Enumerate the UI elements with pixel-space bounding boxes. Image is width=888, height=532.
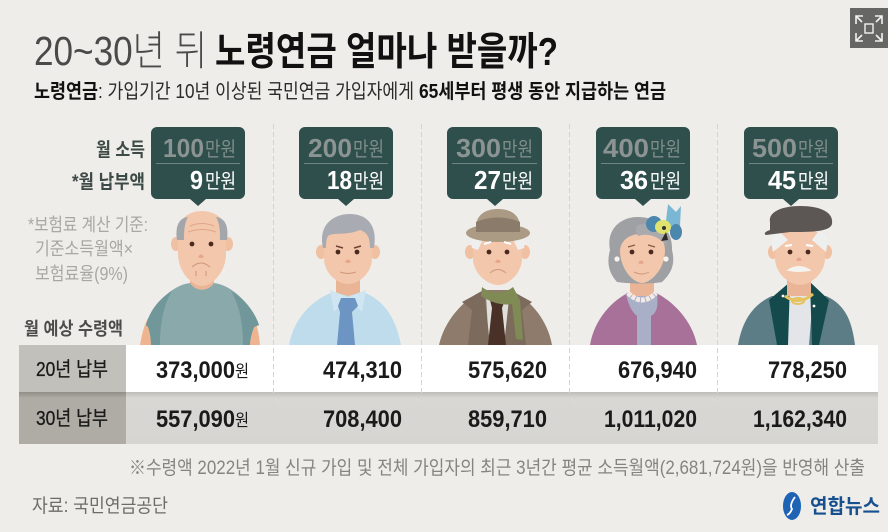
bubble: 400만원 / 36만원: 36 xyxy=(620,165,648,195)
bubble: 300만원 / 27만원: 만원 xyxy=(502,138,533,161)
row: 20년 납부: 778,250 xyxy=(768,357,847,384)
row: 20년 납부: 676,940 xyxy=(618,357,697,384)
subtitle: 65세부터 평생 동안 지급하는 연금 xyxy=(419,80,666,103)
row: 30년 납부: 557,090 xyxy=(156,406,235,433)
bubble: 200만원 / 18만원: 18 xyxy=(327,165,352,195)
row: 30년 납부 xyxy=(36,406,847,433)
row labels: income and contribution: 월 소득 xyxy=(96,139,145,161)
row: 30년 납부: 30년 납부 xyxy=(36,407,108,430)
source: 자료: 국민연금공단 xyxy=(32,495,168,517)
person: 400만원 woman with flower and pearls xyxy=(590,204,697,345)
bubble: 500만원 / 45만원: 500 xyxy=(752,133,797,163)
heading: expected monthly pension: 월 예상 수령액 xyxy=(24,319,123,339)
bubble: 100만원 / 9만원: 만원 xyxy=(205,170,236,193)
bubble: 100만원 / 9만원: 9 xyxy=(190,165,203,195)
bubble: 500만원 / 45만원: 만원 xyxy=(798,138,829,161)
subtitle: : 가입기간 10년 이상된 국민연금 가입자에게 xyxy=(98,80,414,103)
row: 30년 납부: 859,710 xyxy=(468,406,547,433)
row: 20년 납부: 474,310 xyxy=(323,357,402,384)
bubble: 500만원 / 45만원: 45 xyxy=(768,165,796,195)
bubble: 300만원 / 27만원: 300 xyxy=(456,133,501,163)
person: 500만원 man with flat cap and gold chain xyxy=(738,206,855,345)
bubble: 400만원 / 36만원: 만원 xyxy=(650,138,681,161)
row: 20년 납부 xyxy=(36,357,847,384)
row: 20년 납부: 373,000 xyxy=(156,357,235,384)
bubble: 100만원 / 9만원: 만원 xyxy=(205,138,236,161)
note: premium calculation basis: 기준소득월액× xyxy=(35,239,133,259)
subtitle: 노령연금 xyxy=(34,80,98,103)
bubble: 200만원 / 18만원: 200 xyxy=(308,133,352,163)
bubble: 400만원 / 36만원: 만원 xyxy=(650,170,681,193)
bubble: 500만원 / 45만원: 만원 xyxy=(798,170,829,193)
person: 300만원 man with hat and scarf xyxy=(439,209,552,345)
table: expected monthly pension xyxy=(19,345,878,444)
note: premium calculation basis xyxy=(28,215,148,284)
bubble: 300만원 / 27만원: 27 xyxy=(474,165,501,195)
bubble: 300만원 / 27만원 xyxy=(447,127,542,206)
row: 20년 납부: 20년 납부 xyxy=(36,358,108,381)
person: 200만원 man in blue shirt and tie xyxy=(289,214,401,345)
row: 30년 납부: 1,162,340 xyxy=(753,406,847,433)
logo: Yonhap News: 연합뉴스 xyxy=(810,495,880,518)
title: 노령연금 얼마나 받을까? xyxy=(215,31,558,74)
bubble: 200만원 / 18만원: 만원 xyxy=(353,138,384,161)
row: 30년 납부: 1,011,020 xyxy=(604,406,697,433)
row: 20년 납부: 원 xyxy=(235,362,249,381)
bubble: 100만원 / 9만원: 100 xyxy=(163,133,204,163)
bubble: 400만원 / 36만원: 400 xyxy=(603,133,649,163)
logo: Yonhap News xyxy=(783,492,880,520)
bubble: 300만원 / 27만원: 만원 xyxy=(502,170,533,193)
row: 30년 납부: 708,400 xyxy=(323,406,402,433)
row: 20년 납부: 575,620 xyxy=(468,357,547,384)
note: premium calculation basis: *보험료 계산 기준: xyxy=(28,215,148,235)
bubble: 500만원 / 45만원 xyxy=(744,127,838,206)
subtitle xyxy=(34,80,666,103)
title xyxy=(34,28,558,74)
title: 20~30년 뒤 xyxy=(34,28,207,74)
bubble: 100만원 / 9만원 xyxy=(151,127,245,206)
row labels: income and contribution: *월 납부액 xyxy=(72,171,145,193)
row: 30년 납부: 원 xyxy=(235,411,249,430)
row labels: income and contribution xyxy=(72,139,145,193)
note: premium calculation basis: 보험료율(9%) xyxy=(35,264,128,284)
person: 100만원 man in teal T-shirt xyxy=(140,211,260,345)
bubble: 400만원 / 36만원 xyxy=(596,127,690,206)
bubble: 200만원 / 18만원 xyxy=(299,127,393,206)
icon: expand button xyxy=(850,8,888,48)
bubble: 200만원 / 18만원: 만원 xyxy=(353,170,384,193)
